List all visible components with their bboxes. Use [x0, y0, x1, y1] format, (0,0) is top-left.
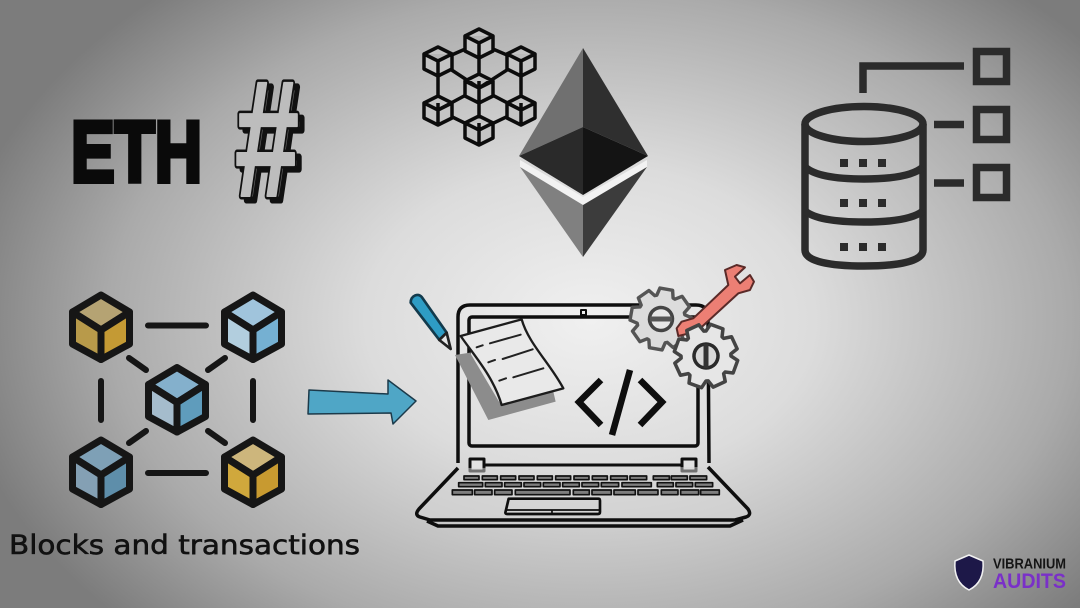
logo wordmark: VIBRANIUM: VIBRANIUM — [993, 556, 1066, 572]
icon: 3D hash symbol: # — [240, 51, 304, 236]
laptop lid and screen — [458, 305, 709, 463]
connector lines — [863, 66, 964, 183]
logo shield — [955, 555, 983, 590]
linked squares — [976, 52, 1006, 198]
icon: blockchain network of cubes — [424, 29, 535, 145]
gear: lower — [666, 316, 746, 396]
logo wordmark: AUDITS: AUDITS — [993, 570, 1066, 593]
document with shadow — [455, 319, 563, 420]
icon: 3D hash symbol: # — [235, 47, 299, 232]
icon: 3D hash symbol: # — [235, 47, 299, 232]
touchpad — [505, 499, 600, 514]
database cylinder — [805, 106, 923, 266]
laptop — [417, 305, 750, 526]
document shadow — [455, 353, 556, 420]
diagram: blocks network — [72, 295, 282, 504]
hinges — [470, 459, 696, 471]
icon: database with linked squares — [805, 52, 1006, 266]
icon: Ethereum diamond logo — [519, 48, 648, 257]
webcam — [581, 310, 586, 315]
caption: Blocks and transactions: Blocks and transactions — [9, 530, 360, 561]
logo: Vibranium Audits — [955, 555, 1066, 593]
gear: upper — [626, 284, 696, 354]
database indicator dots — [840, 159, 886, 251]
document text lines — [477, 335, 543, 381]
wrench — [677, 265, 754, 336]
block: bottom left blue — [72, 440, 130, 504]
code symbol — [579, 370, 662, 435]
block: top left gold — [72, 295, 130, 360]
block: bottom right gold — [224, 440, 282, 504]
arrow: blocks to laptop — [308, 380, 416, 424]
laptop base — [417, 465, 750, 526]
icon: gears and wrench — [626, 265, 754, 396]
keyboard keys — [452, 476, 719, 495]
block: centre blue — [148, 368, 206, 432]
heading: ETH: ETH — [71, 104, 202, 200]
connector lines between blocks — [101, 326, 253, 473]
icon: pencil — [411, 295, 451, 349]
block: top right blue — [224, 295, 282, 360]
document sheet — [461, 319, 563, 405]
